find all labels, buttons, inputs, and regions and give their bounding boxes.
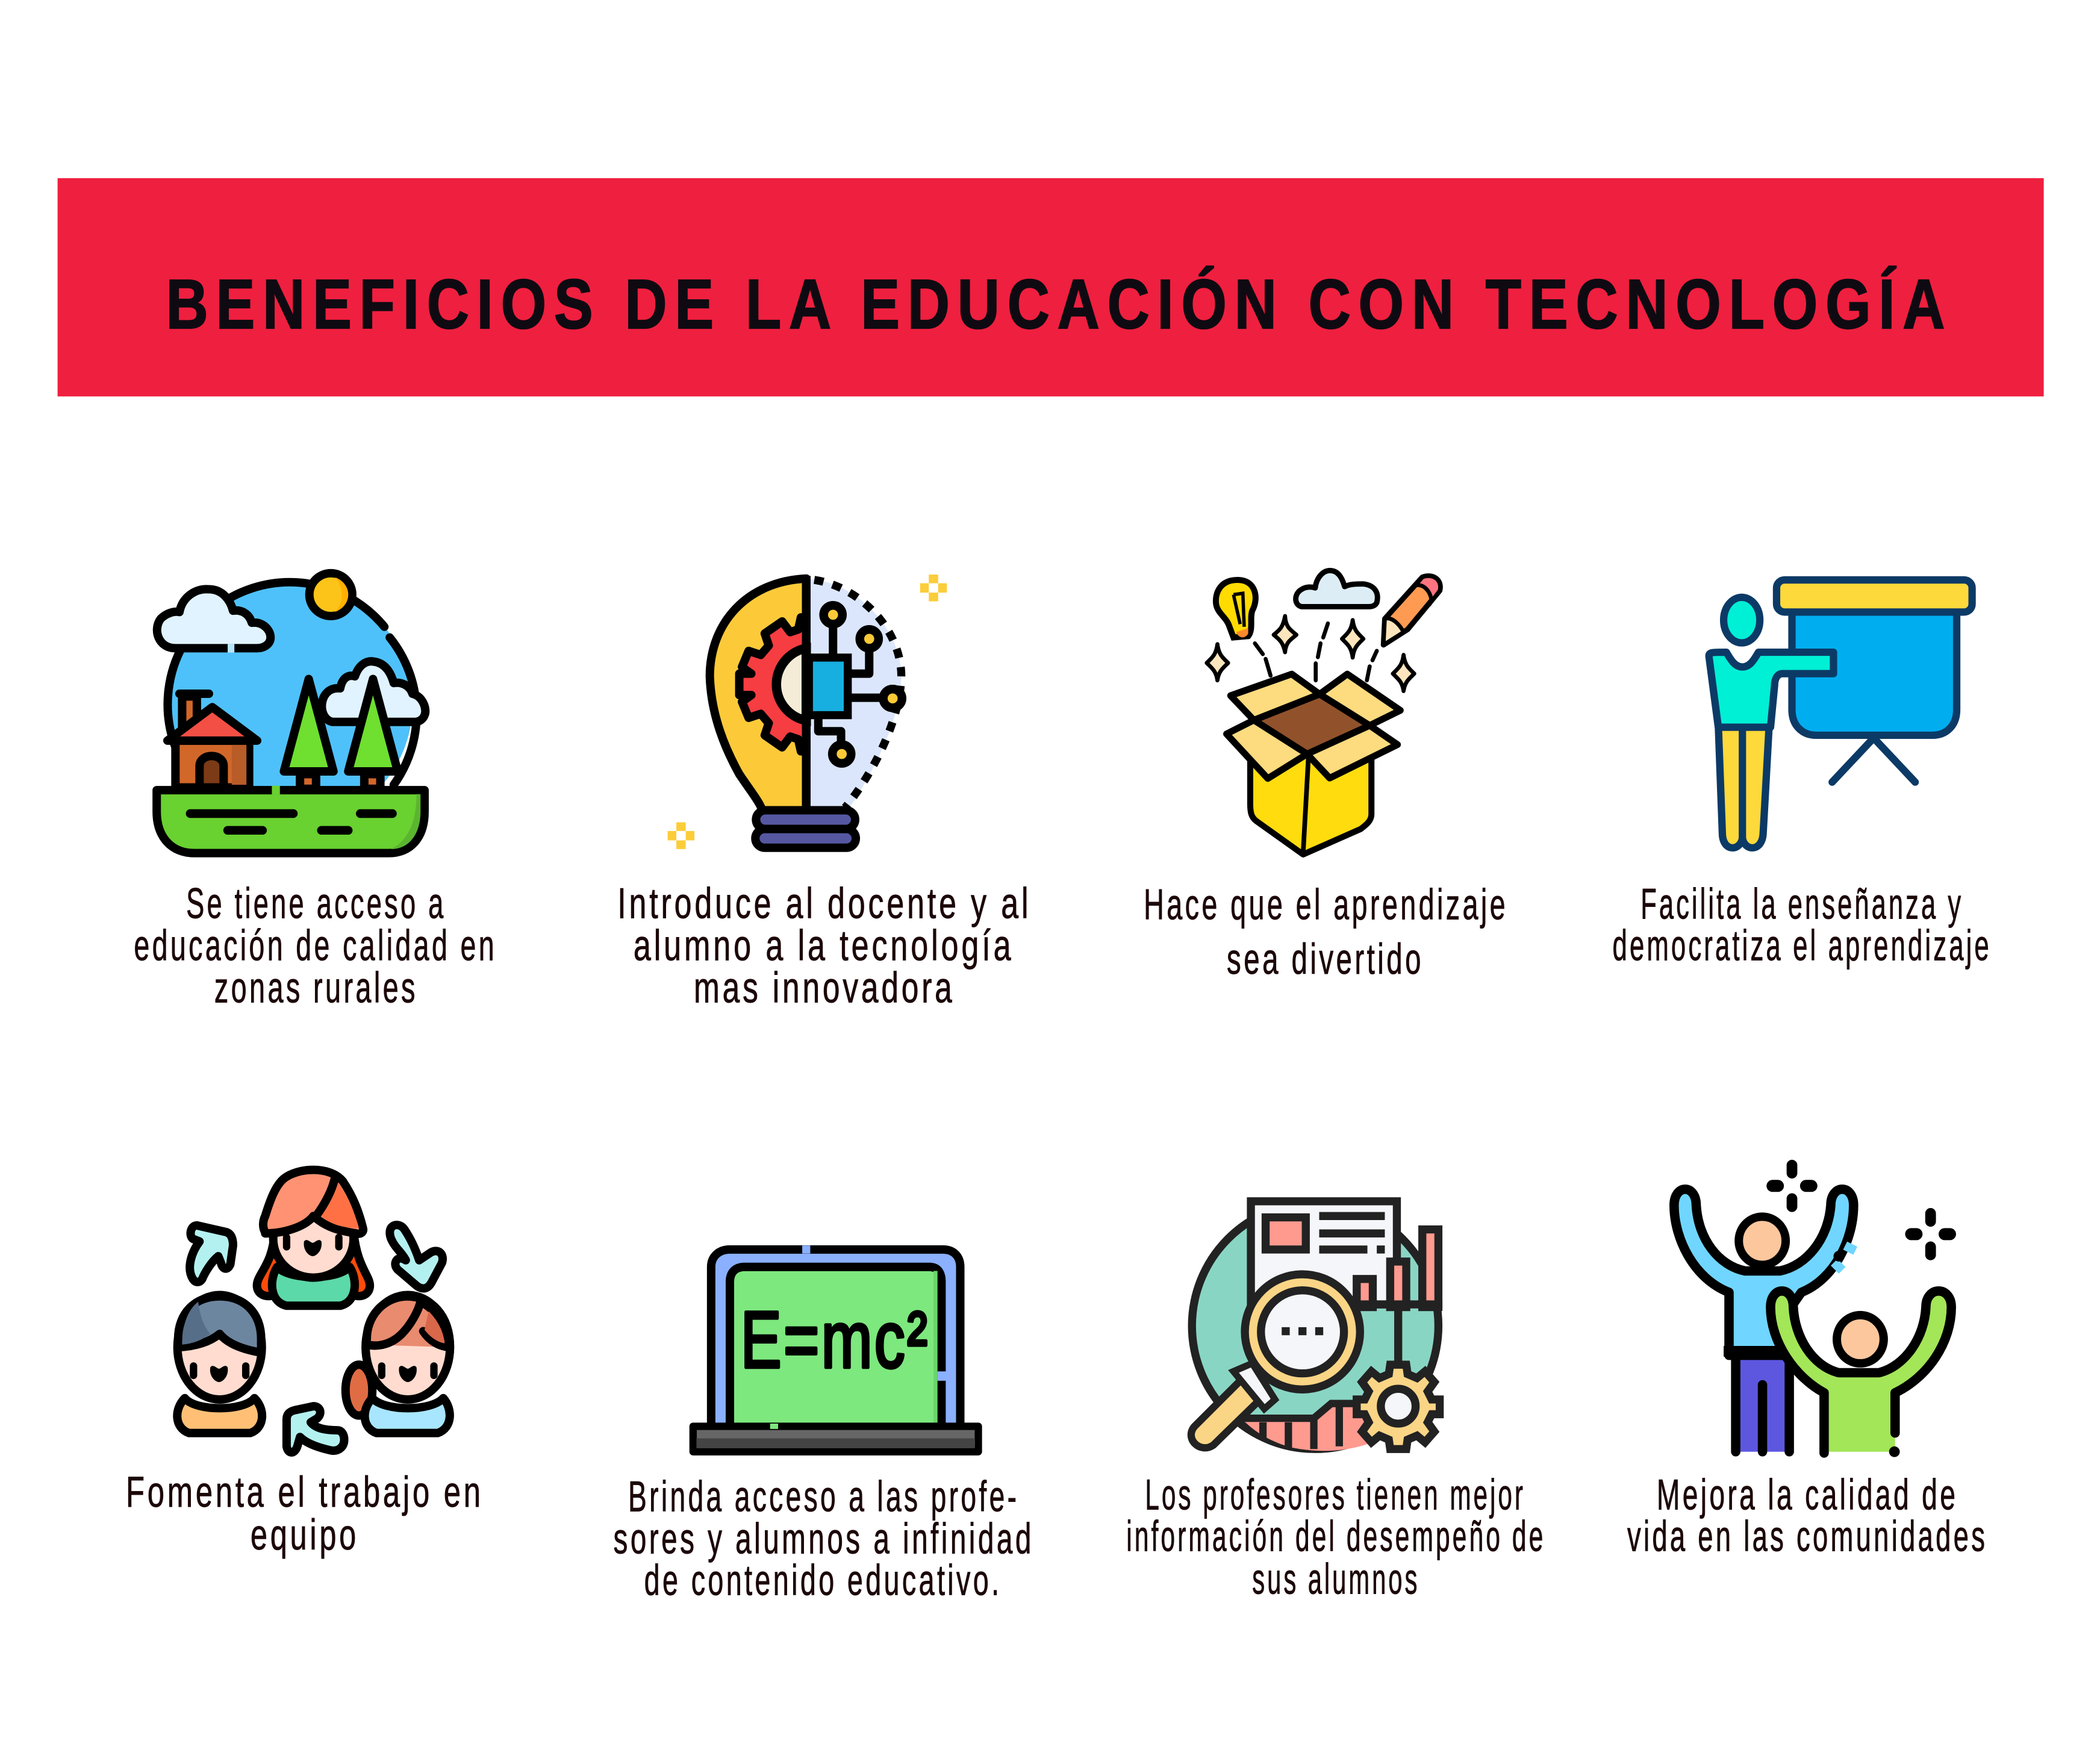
panel: trabajo en equipo xyxy=(126,1170,484,1559)
caption: zonas rurales xyxy=(214,965,418,1012)
icon: two people celebrating xyxy=(1674,1160,1956,1457)
caption: Brinda acceso a las profe- xyxy=(628,1474,1019,1521)
panel: calidad de vida xyxy=(1627,1160,1987,1560)
caption xyxy=(1613,881,1992,970)
caption xyxy=(1126,1471,1545,1603)
caption: Los profesores tienen mejor xyxy=(1145,1471,1525,1519)
caption: sus alumnos xyxy=(1252,1555,1419,1603)
caption: Fomenta el trabajo en xyxy=(126,1469,484,1516)
panel: tecnología innovadora xyxy=(617,575,1031,1012)
caption: información del desempeño de xyxy=(1126,1513,1545,1560)
caption: mas innovadora xyxy=(694,965,955,1012)
caption: educación de calidad en xyxy=(134,923,497,970)
caption xyxy=(134,880,497,1012)
caption xyxy=(617,880,1031,1012)
icon: chalkboard with formula xyxy=(693,1245,979,1452)
panel: desempeño de alumnos xyxy=(1126,1201,1545,1603)
caption: sores y alumnos a infinidad xyxy=(614,1516,1034,1563)
panel: contenido educativo xyxy=(614,1245,1034,1605)
caption: sea divertido xyxy=(1227,936,1424,983)
caption: de contenido educativo. xyxy=(644,1557,1002,1605)
icon: three people with cycle arrows xyxy=(177,1170,450,1453)
icon: half gear half circuit light bulb xyxy=(668,575,947,849)
caption xyxy=(1627,1471,1987,1560)
caption: equipo xyxy=(251,1512,359,1559)
caption: Introduce al docente y al xyxy=(617,880,1031,927)
panel: aprendizaje divertido xyxy=(1144,570,1508,983)
chalk formula: E=mc² xyxy=(741,1295,929,1385)
icon: open surprise box xyxy=(1207,570,1440,855)
title banner xyxy=(58,178,2044,396)
caption: alumno a la tecnología xyxy=(634,923,1014,970)
panel: democratiza el aprendizaje xyxy=(1613,580,1992,970)
caption xyxy=(126,1469,484,1559)
icon: landscape with house xyxy=(157,573,425,853)
caption xyxy=(614,1474,1034,1605)
icon: report, magnifier and gear xyxy=(1191,1201,1442,1451)
icon: presenter with projection screen xyxy=(1709,580,1972,848)
panel: zonas rurales xyxy=(134,573,497,1012)
caption: Hace que el aprendizaje xyxy=(1144,882,1508,929)
caption: Se tiene acceso a xyxy=(186,880,446,927)
caption xyxy=(1144,882,1508,983)
